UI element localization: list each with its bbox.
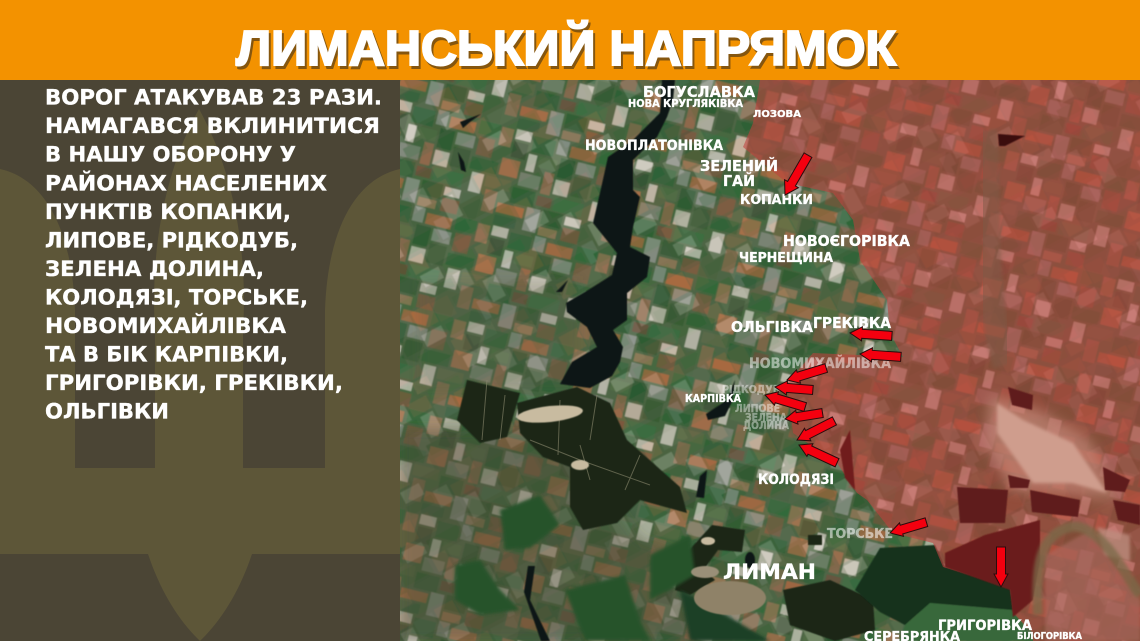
settlement labels: ДОЛИНА (743, 419, 789, 432)
text block: summary of attacks: НАМАГАВСЯ ВКЛИНИТИСЯ (45, 114, 380, 138)
settlement labels: ТОРСЬКЕ (827, 527, 893, 542)
text block: summary of attacks: В НАШУ ОБОРОНУ У (45, 142, 296, 166)
text block: summary of attacks: ТА В БІК КАРПІВКИ, (45, 342, 288, 366)
settlement labels: ЛИПОВЕ (735, 402, 780, 415)
regional tone variation (400, 280, 700, 641)
settlement labels: БОГУСЛАВКА (643, 83, 755, 101)
attack arrows (763, 151, 1008, 587)
satellite map (390, 70, 1140, 641)
settlement labels (585, 83, 1083, 641)
settlement labels: ЛОЗОВА (753, 109, 801, 120)
title: ЛИМАНСЬКИЙ НАПРЯМОК (236, 21, 896, 76)
settlement labels: ОЛЬГІВКА (731, 318, 813, 336)
sand patches (516, 403, 766, 615)
occupied territory overlay (743, 80, 1140, 641)
settlement labels: ЛИМАН (723, 560, 816, 584)
settlement labels: КОЛОДЯЗІ (758, 472, 834, 488)
settlement labels: НОВОЄГОРІВКА (783, 232, 910, 250)
settlement labels: ГРИГОРІВКА (938, 618, 1032, 634)
text block: summary of attacks: ГРИГОРІВКИ, ГРЕКІВКИ, (45, 371, 343, 395)
settlement labels: КАРПІВКА (685, 393, 742, 405)
settlement labels: КОПАНКИ (740, 192, 813, 208)
settlement labels: НОВОМИХАЙЛІВКА (749, 355, 892, 372)
settlement labels: НОВА КРУГЛЯКІВКА (628, 98, 744, 110)
text block: summary of attacks: ЛИПОВЕ, РІДКОДУБ, (45, 228, 298, 252)
dark red forests (840, 134, 1140, 617)
south forest under the front line (855, 545, 1035, 641)
text block: summary of attacks: КОЛОДЯЗІ, ТОРСЬКЕ, (45, 286, 308, 310)
settlement labels: ГАЙ (723, 171, 755, 190)
text block: summary of attacks: ЗЕЛЕНА ДОЛИНА, (45, 257, 264, 281)
text block: summary of attacks: ОЛЬГІВКИ (45, 400, 169, 424)
settlement labels: РІДКОДУБ (722, 383, 780, 396)
left text panel background with trident (0, 80, 400, 641)
dark forests (457, 380, 875, 641)
built-up strip (985, 130, 1005, 365)
settlement labels: НОВОПЛАТОНІВКА (585, 138, 723, 154)
settlement labels: ЗЕЛЕНА (745, 411, 787, 424)
settlement labels: ГРЕКІВКА (813, 314, 891, 332)
text block: summary of attacks (45, 86, 382, 424)
header bar (0, 0, 1140, 80)
reservoir and river (458, 80, 755, 641)
settlement labels: ЧЕРНЕЩИНА (739, 251, 833, 266)
green woodland (455, 495, 770, 641)
title: ЛИМАНСЬКИЙ НАПРЯМОК (238, 24, 898, 79)
text block: summary of attacks: ВОРОГ АТАКУВАВ 23 РАЗИ. (45, 86, 382, 110)
settlement labels: ЗЕЛЕНИЙ (700, 156, 778, 175)
river meander (1037, 527, 1140, 615)
text block: summary of attacks: РАЙОНАХ НАСЕЛЕНИХ (45, 170, 327, 196)
text block: summary of attacks: НОВОМИХАЙЛІВКА (45, 313, 287, 338)
mottled surroundings of sand (985, 395, 1120, 500)
south-east land (1045, 530, 1140, 641)
farmland base (390, 70, 1140, 641)
pale sand terrain (997, 403, 1107, 493)
forest firebreak lines (482, 380, 650, 490)
text block: summary of attacks: ПУНКТІВ КОПАНКИ, (45, 200, 291, 224)
